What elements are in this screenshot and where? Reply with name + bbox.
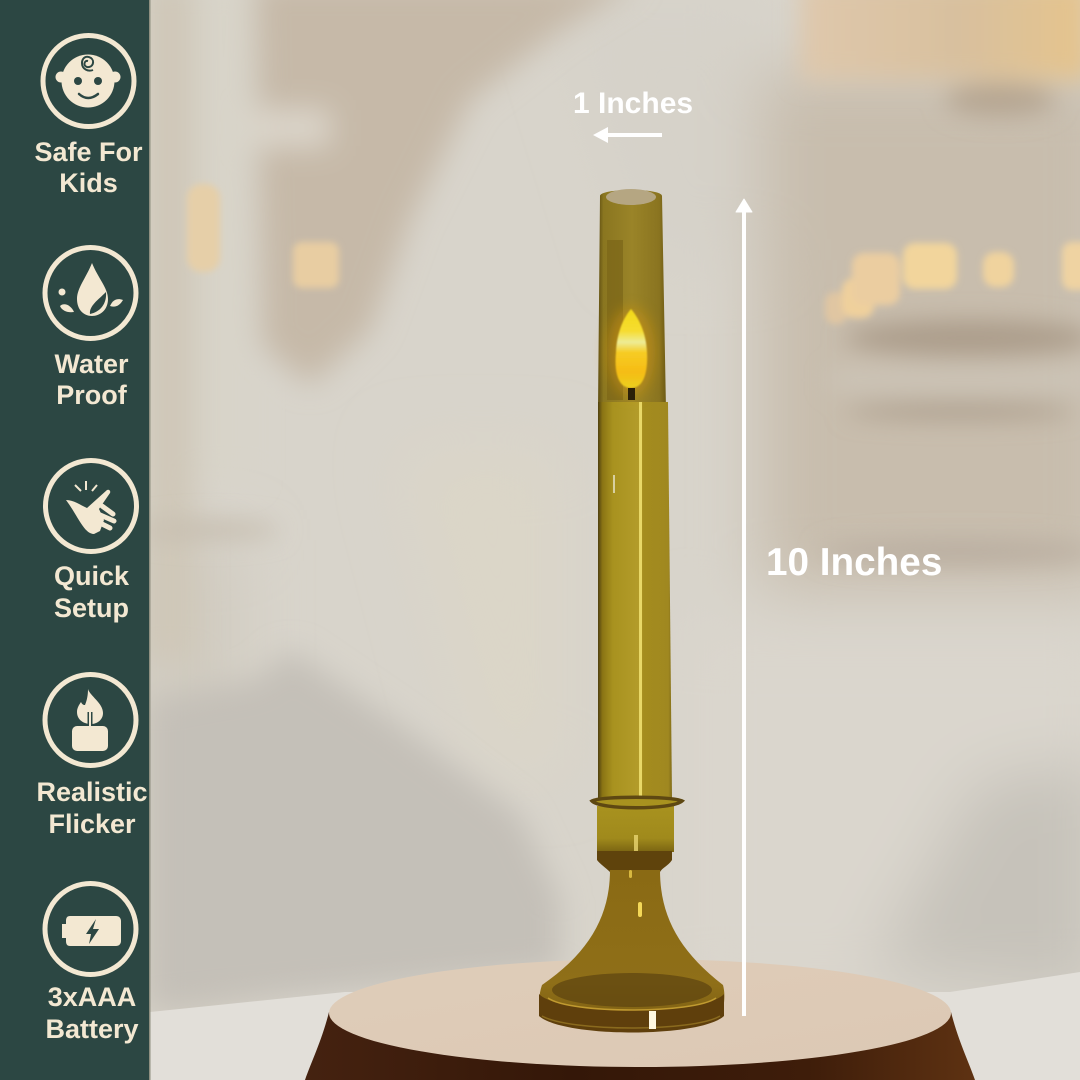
feature: 3xAAA Battery: 3xAAA — [48, 982, 136, 1012]
feature: Quick Setup — [46, 460, 136, 623]
glass tube — [598, 190, 666, 410]
feature: Safe For Kids — [34, 36, 143, 198]
feature: Quick Setup: Setup — [54, 593, 129, 623]
feature: Water Proof: Proof — [56, 380, 128, 410]
feature: Quick Setup: Quick — [54, 561, 130, 591]
wooden pedestal — [305, 959, 975, 1080]
feature: Realistic Flicker — [36, 674, 148, 839]
feature: Realistic Flicker: Realistic — [36, 777, 148, 807]
table surface — [150, 972, 1080, 1080]
lower cup — [597, 806, 674, 852]
height arrow — [736, 199, 752, 1016]
feature: 3xAAA Battery: Battery — [45, 1014, 139, 1044]
width arrow — [593, 127, 662, 143]
collar ring — [592, 797, 682, 808]
candle body — [598, 402, 672, 800]
feature: 3xAAA Battery — [45, 884, 139, 1044]
feature: Safe For Kids: Kids — [59, 168, 118, 198]
feature: Water Proof — [45, 248, 136, 410]
collar — [597, 851, 672, 872]
sidebar panel — [0, 0, 150, 1080]
label: 10 Inches: 10 Inches — [766, 541, 942, 584]
flame — [607, 308, 655, 400]
feature: Water Proof: Water — [54, 349, 129, 379]
label: 1 Inches: 1 Inches — [573, 87, 693, 120]
candle holder with candle — [539, 189, 724, 1032]
feature: Realistic Flicker: Flicker — [48, 809, 136, 839]
flared foot — [539, 870, 724, 1032]
feature: Safe For Kids: Safe For — [34, 137, 143, 167]
